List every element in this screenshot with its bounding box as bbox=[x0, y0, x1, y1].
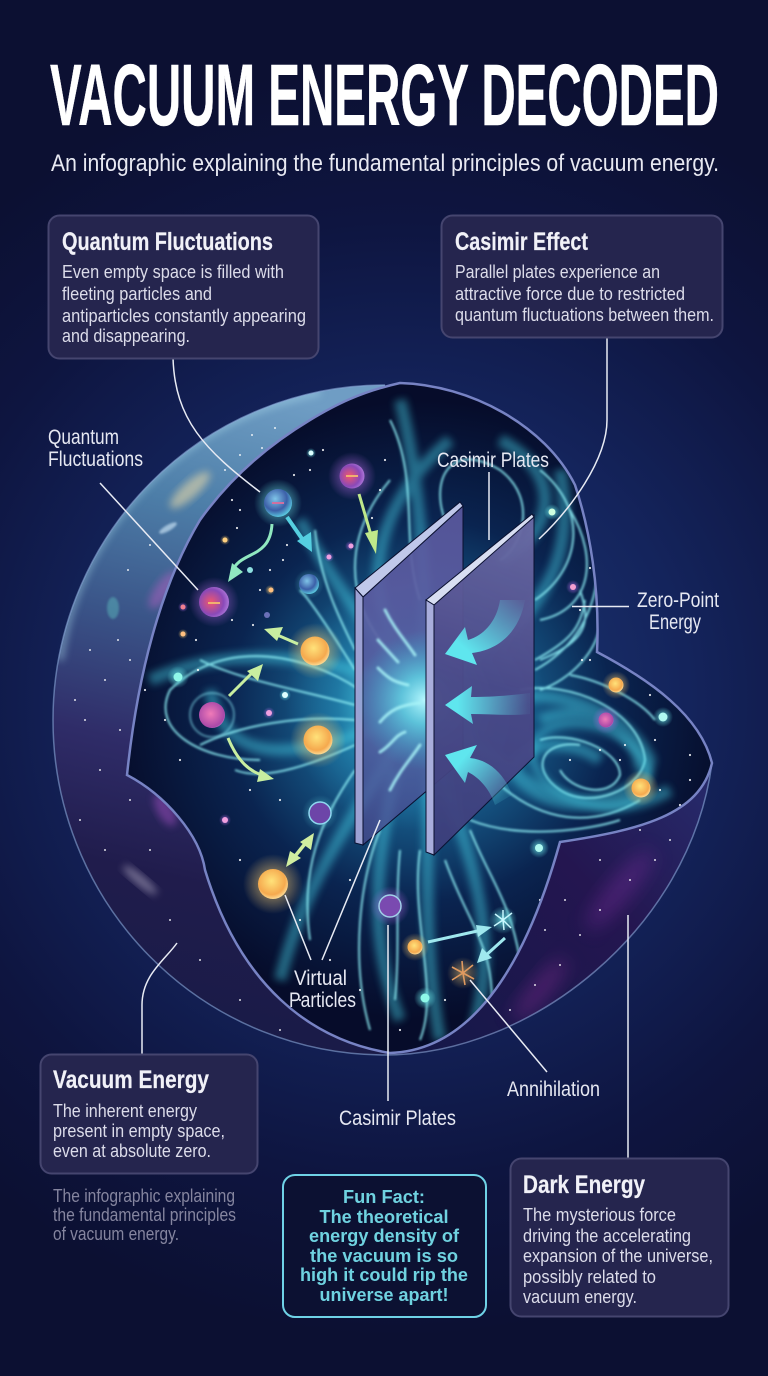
text: dark energy body: possibly related to bbox=[523, 1266, 656, 1287]
panel: vacuum energy bbox=[40, 1054, 258, 1174]
arrow: upper force bbox=[445, 600, 525, 665]
plate force arrows bbox=[445, 600, 530, 805]
arrow: middle force bbox=[445, 686, 530, 724]
text: casimir effect body: attractive force due to restricted bbox=[455, 283, 685, 304]
text: dark energy body: The mysterious force bbox=[523, 1204, 676, 1225]
arrow: lime diagonal bbox=[229, 664, 263, 696]
particle: gold right bbox=[623, 770, 659, 806]
text: quantum fluctuations body: and disappearing. bbox=[62, 325, 190, 346]
left Casimir plate bbox=[355, 502, 495, 845]
sphere shell bbox=[53, 385, 712, 1055]
text: casimir effect body bbox=[455, 261, 714, 325]
label: quantum fluctuations: Quantum bbox=[48, 425, 119, 449]
stars bbox=[145, 431, 690, 1030]
particle: orange right bbox=[602, 671, 630, 699]
label: zero-point energy: Zero-Point bbox=[637, 588, 719, 612]
particle: spiral purple bbox=[190, 693, 234, 737]
text: casimir effect body: Parallel plates experience an bbox=[455, 261, 660, 282]
heading: casimir effect: Casimir Effect bbox=[455, 228, 589, 256]
label: virtual particles: Virtual bbox=[294, 966, 347, 990]
arrow: double lower bbox=[286, 833, 314, 867]
text: side note: of vacuum energy. bbox=[53, 1223, 179, 1244]
callout: fun fact: energy density of bbox=[309, 1226, 460, 1246]
particle: small purple bbox=[302, 795, 338, 831]
particle: pink right bbox=[592, 706, 620, 734]
text: vacuum energy body: even at absolute zero. bbox=[53, 1140, 211, 1161]
text: quantum fluctuations body: antiparticles constantly appearing bbox=[62, 305, 306, 326]
coloured sparks bbox=[167, 448, 673, 1009]
text: dark energy body: expansion of the universe, bbox=[523, 1245, 713, 1266]
label: zero-point energy bbox=[637, 588, 719, 634]
right Casimir plate bbox=[426, 514, 534, 855]
particle: gold large bbox=[243, 854, 303, 914]
heading: vacuum energy: Vacuum Energy bbox=[53, 1066, 209, 1094]
arrow: mint curved bbox=[228, 524, 272, 582]
callout: fun fact: universe apart! bbox=[320, 1285, 448, 1305]
particle: red top bbox=[328, 452, 376, 500]
arrow: to annihilation bbox=[428, 925, 492, 942]
arrow: burst return bbox=[477, 938, 505, 963]
arrow: lime curved bbox=[228, 738, 274, 782]
callout: fun fact: high it could rip the bbox=[300, 1265, 468, 1285]
particle: gold upper bbox=[287, 623, 343, 679]
label: quantum fluctuations bbox=[48, 425, 143, 471]
particle: purple left bbox=[189, 577, 239, 627]
text: vacuum energy body bbox=[53, 1100, 225, 1161]
particle: orange lower bbox=[401, 933, 429, 961]
text: side note bbox=[53, 1185, 236, 1244]
text: casimir effect body: quantum fluctuations between them. bbox=[455, 304, 714, 325]
text: dark energy body: vacuum energy. bbox=[523, 1286, 637, 1307]
label: annihilation: Annihilation bbox=[507, 1077, 600, 1101]
arrow: lime left bbox=[264, 627, 298, 644]
particle: gold middle bbox=[290, 712, 346, 768]
text: quantum fluctuations body: Even empty space is filled with bbox=[62, 261, 284, 282]
label: virtual particles bbox=[289, 966, 356, 1012]
arrow: cyan bbox=[287, 517, 312, 552]
label: zero-point energy: Energy bbox=[649, 610, 701, 634]
label: casimir plates top: Casimir Plates bbox=[437, 448, 549, 472]
sphere interior bbox=[127, 383, 712, 1053]
callout: fun fact: The theoretical bbox=[320, 1207, 448, 1227]
sphere illustration bbox=[53, 383, 712, 1055]
annihilation bursts bbox=[447, 906, 517, 989]
text: quantum fluctuations body bbox=[62, 261, 306, 346]
label: virtual particles: Particles bbox=[289, 988, 356, 1012]
label: casimir plates bottom: Casimir Plates bbox=[339, 1106, 456, 1130]
panel: quantum fluctuations bbox=[48, 216, 318, 358]
text: vacuum energy body: present in empty space, bbox=[53, 1120, 225, 1141]
particle: small blue bbox=[294, 569, 324, 599]
particles bbox=[189, 452, 659, 989]
callout: fun fact: Fun Fact: bbox=[343, 1187, 425, 1207]
text: dark energy body bbox=[523, 1204, 713, 1307]
arrows bbox=[228, 494, 505, 963]
rim outline bbox=[53, 385, 712, 1055]
panel: dark energy bbox=[510, 1158, 728, 1316]
callout: fun fact: the vacuum is so bbox=[310, 1246, 458, 1266]
text: side note: the fundamental principles bbox=[53, 1204, 236, 1225]
text: side note: The infographic explaining bbox=[53, 1185, 235, 1206]
particle: blue bbox=[254, 479, 302, 527]
text: vacuum energy body: The inherent energy bbox=[53, 1100, 198, 1121]
arrow: lower force bbox=[445, 745, 512, 805]
label: quantum fluctuations: Fluctuations bbox=[48, 447, 143, 471]
heading: dark energy: Dark Energy bbox=[523, 1171, 645, 1199]
panel: casimir effect bbox=[442, 216, 722, 338]
callout: fun fact bbox=[283, 1175, 486, 1317]
text: quantum fluctuations body: fleeting particles and bbox=[62, 283, 212, 304]
leader lines bbox=[100, 338, 629, 1158]
text: dark energy body: driving the accelerating bbox=[523, 1225, 691, 1246]
energy wisps bbox=[150, 400, 670, 1040]
arrow: lime top bbox=[359, 494, 378, 554]
particle: violet lower bbox=[370, 886, 410, 926]
heading: quantum fluctuations: Quantum Fluctuations bbox=[62, 228, 273, 256]
